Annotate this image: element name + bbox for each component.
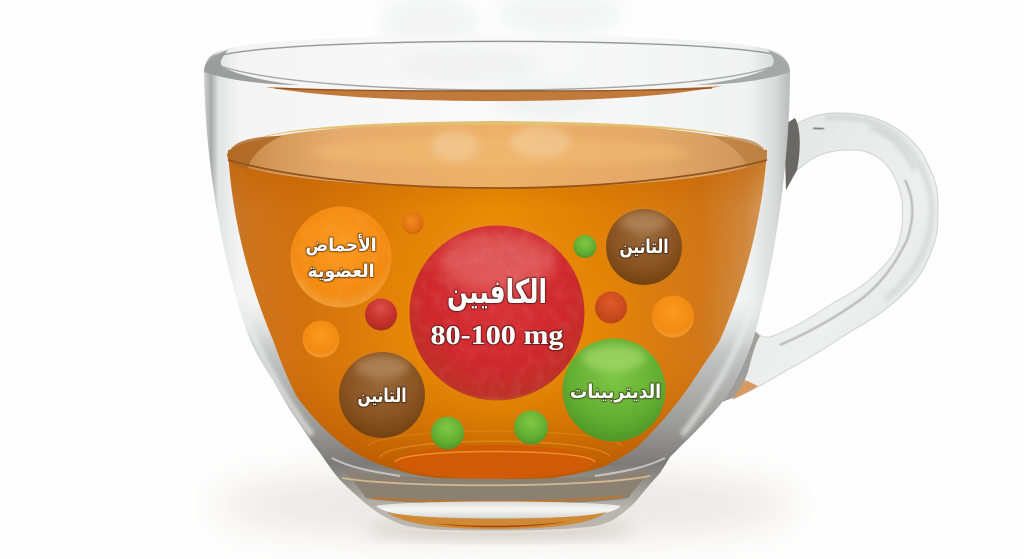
glass cup body [204,35,794,535]
molecule: tannin left [339,352,425,438]
molecule: organic acids [290,206,392,308]
molecule: caffeine: 80-100 mg [430,319,564,350]
cup base [332,458,665,532]
tea liquid [227,121,767,481]
molecule: small orange top [402,212,424,234]
molecule: caffeine: الكافيين [447,272,547,312]
molecule: caffeine [410,226,584,400]
molecule: tannin left: التانين [358,385,406,407]
tea vertical shading [228,150,767,481]
molecule: diterpenes: الديتربينات [570,381,661,403]
faint steam inside the cup [400,47,600,116]
bottom swirl of the tea [368,431,622,479]
molecule: small green top [574,235,596,258]
table shadow [215,471,795,539]
molecule: small green bottom left [431,416,464,450]
molecule: small orange right [652,296,694,338]
tea surface [227,122,767,188]
molecule: tannin right [606,209,682,285]
steam above the cup [380,0,625,97]
molecule: small green bottom right [514,410,548,444]
molecule: small red left [365,298,397,330]
tea surface front line [228,160,767,188]
rim of the cup [204,41,790,101]
molecule: tannin right: التانين [620,236,668,258]
molecule: diterpenes [562,338,666,442]
tea body [228,150,767,481]
molecule: organic acids: العضوية [308,261,374,282]
molecule: organic acids: الأحماض [306,234,376,256]
cup handle [722,113,938,402]
molecule: small orange left [302,320,340,358]
reflected tea line [265,86,722,101]
infographic: tea cup composition [204,0,938,551]
lower glass thickness [241,312,758,531]
molecule: small red right [595,292,627,324]
outer glass wall [204,35,790,532]
